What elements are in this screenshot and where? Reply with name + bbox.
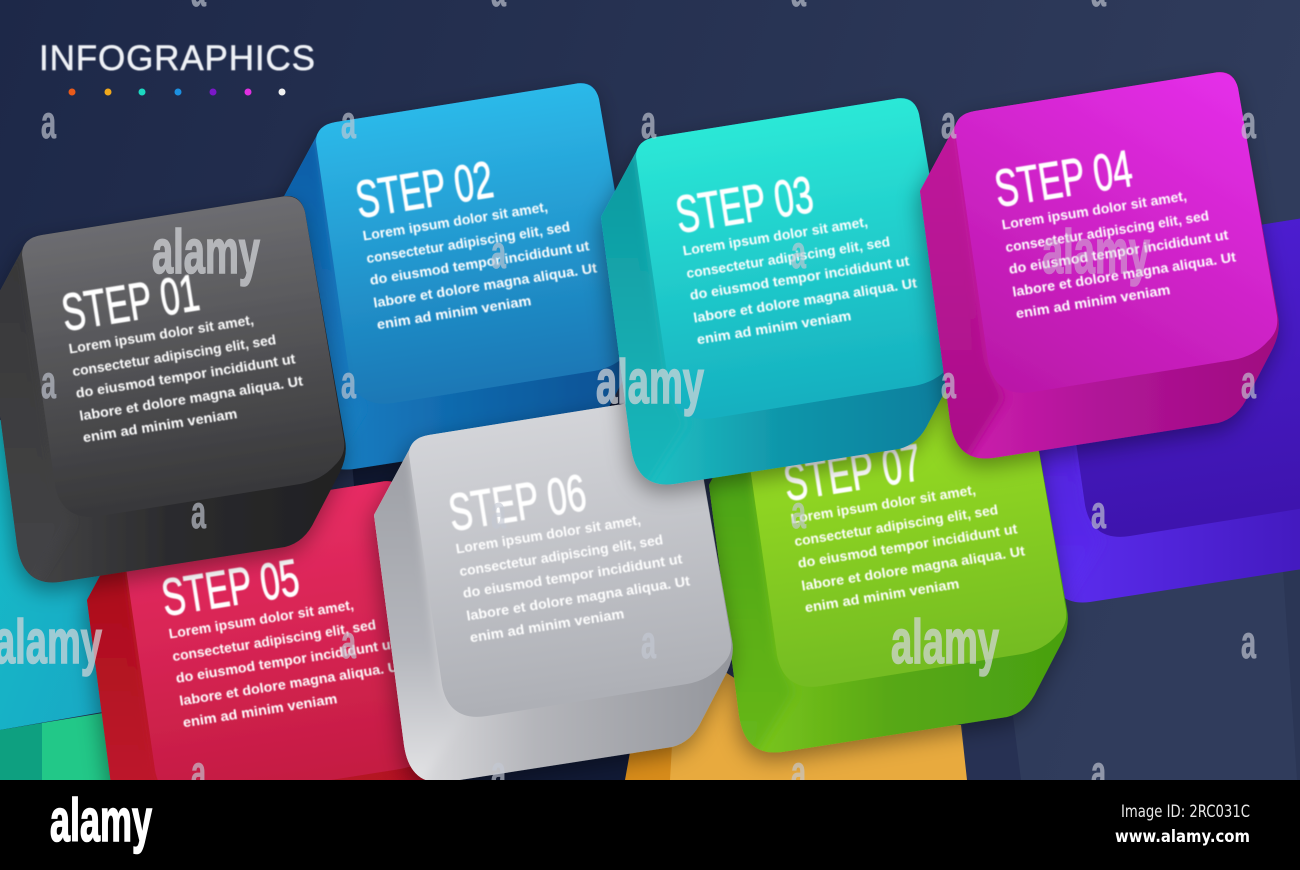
heading and text: enim ad minim veniam — [82, 406, 238, 445]
green strip bottom left — [0, 711, 120, 780]
heading and text: do eiusmod tempor incididunt ut — [462, 551, 684, 601]
heading and text — [58, 250, 308, 446]
watermark logos: alamy — [596, 348, 704, 417]
heading and text: consectetur adipiscing elit, sed — [458, 532, 664, 579]
panel: step 07 — [692, 366, 1068, 760]
heading and text: do eiusmod tempor incididunt ut — [797, 521, 1019, 571]
heading and text: enim ad minim veniam — [804, 576, 960, 615]
heading and text: consectetur adipiscing elit, sed — [71, 332, 277, 379]
heading and text: do eiusmod tempor incididunt ut — [175, 636, 397, 686]
footer logo: alamy — [50, 787, 152, 854]
watermark letters: a — [191, 486, 206, 538]
heading and text: Lorem ipsum dolor sit amet, — [682, 214, 869, 259]
heading and text: consectetur adipiscing elit, sed — [1004, 208, 1210, 255]
watermark letters: a — [1091, 486, 1106, 538]
heading and text — [991, 126, 1241, 322]
watermark logos: alamy — [891, 608, 999, 677]
footer bar — [0, 780, 1300, 870]
title: INFOGRAPHICS — [39, 39, 315, 78]
heading and text: consectetur adipiscing elit, sed — [171, 617, 377, 664]
watermark letters: a — [491, 226, 506, 278]
heading and text: enim ad minim veniam — [469, 606, 625, 645]
heading and text: do eiusmod tempor incididunt ut — [689, 253, 911, 303]
heading and text: STEP 07 — [780, 434, 925, 513]
heading and text: Lorem ipsum dolor sit amet, — [1001, 188, 1188, 233]
heading and text — [672, 152, 922, 348]
watermark letters: a — [791, 226, 806, 278]
heading and text — [158, 535, 408, 731]
heading and text: STEP 04 — [991, 140, 1136, 219]
panel: teal block left — [0, 400, 120, 780]
watermark letters: a — [1241, 96, 1256, 148]
watermark letters: a — [491, 486, 506, 538]
heading and text: labore et dolore magna aliqua. Ut — [78, 373, 304, 424]
heading and text — [352, 137, 602, 333]
watermark letters: a — [191, 746, 206, 798]
panel: purple block — [1039, 218, 1300, 602]
heading and text: STEP 03 — [672, 166, 817, 245]
heading and text — [445, 450, 695, 646]
watermark letters: a — [641, 96, 656, 148]
heading and text: labore et dolore magna aliqua. Ut — [178, 658, 404, 709]
watermark letters: a — [941, 96, 956, 148]
heading and text: enim ad minim veniam — [182, 691, 338, 730]
heading and text: Lorem ipsum dolor sit amet, — [362, 199, 549, 244]
watermark letters: a — [1241, 616, 1256, 668]
heading and text: do eiusmod tempor incididunt ut — [1008, 227, 1230, 277]
heading and text — [780, 420, 1030, 616]
watermark letters: a — [791, 486, 806, 538]
heading and text: Lorem ipsum dolor sit amet, — [168, 597, 355, 642]
watermark letters: a — [641, 616, 656, 668]
watermark letters: a — [491, 746, 506, 798]
heading and text: enim ad minim veniam — [696, 308, 852, 347]
heading and text: enim ad minim veniam — [1015, 282, 1171, 321]
heading and text: Lorem ipsum dolor sit amet, — [455, 512, 642, 557]
watermark letters: a — [941, 356, 956, 408]
heading and text: labore et dolore magna aliqua. Ut — [692, 275, 918, 326]
heading and text: enim ad minim veniam — [376, 293, 532, 332]
watermark logos: alamy — [1042, 218, 1150, 287]
heading and text: STEP 06 — [445, 464, 590, 543]
watermark letters: a — [791, 746, 806, 798]
watermark logos: alamy — [152, 218, 260, 287]
watermark letters: a — [1091, 746, 1106, 798]
watermark letters: a — [341, 96, 356, 148]
heading and text: STEP 01 — [58, 264, 203, 343]
heading and text: consectetur adipiscing elit, sed — [685, 234, 891, 281]
panel: step 05 — [74, 481, 426, 780]
website: www.alamy.com — [1115, 827, 1250, 847]
legend dots — [68, 88, 286, 96]
watermark letters: a — [341, 356, 356, 408]
heading and text: Lorem ipsum dolor sit amet, — [790, 482, 977, 527]
panel: lower navy strips — [350, 400, 1300, 780]
heading and text: labore et dolore magna aliqua. Ut — [372, 260, 598, 311]
watermark logos — [0, 218, 1150, 677]
heading and text: do eiusmod tempor incididunt ut — [369, 238, 591, 288]
watermark letters: a — [341, 616, 356, 668]
image id: Image ID: 2RC031C — [1121, 802, 1250, 821]
panel: step 02 — [264, 83, 640, 477]
watermark letters: a — [1241, 356, 1256, 408]
panel: step 06 — [357, 396, 733, 790]
heading and text: Lorem ipsum dolor sit amet, — [68, 312, 255, 357]
panel: step 01 — [0, 196, 346, 590]
panel: orange block — [625, 670, 967, 780]
heading and text: labore et dolore magna aliqua. Ut — [465, 573, 691, 624]
watermark letters: a — [41, 356, 56, 408]
heading and text: do eiusmod tempor incididunt ut — [75, 351, 297, 401]
heading and text: consectetur adipiscing elit, sed — [793, 502, 999, 549]
panel: step 04 — [903, 72, 1279, 466]
heading and text: STEP 02 — [352, 151, 497, 230]
heading and text: labore et dolore magna aliqua. Ut — [800, 543, 1026, 594]
watermark letters: a — [41, 96, 56, 148]
heading and text: consectetur adipiscing elit, sed — [365, 219, 571, 266]
heading and text: STEP 05 — [158, 549, 303, 628]
panel: step 03 — [584, 98, 960, 492]
heading and text: labore et dolore magna aliqua. Ut — [1011, 249, 1237, 300]
